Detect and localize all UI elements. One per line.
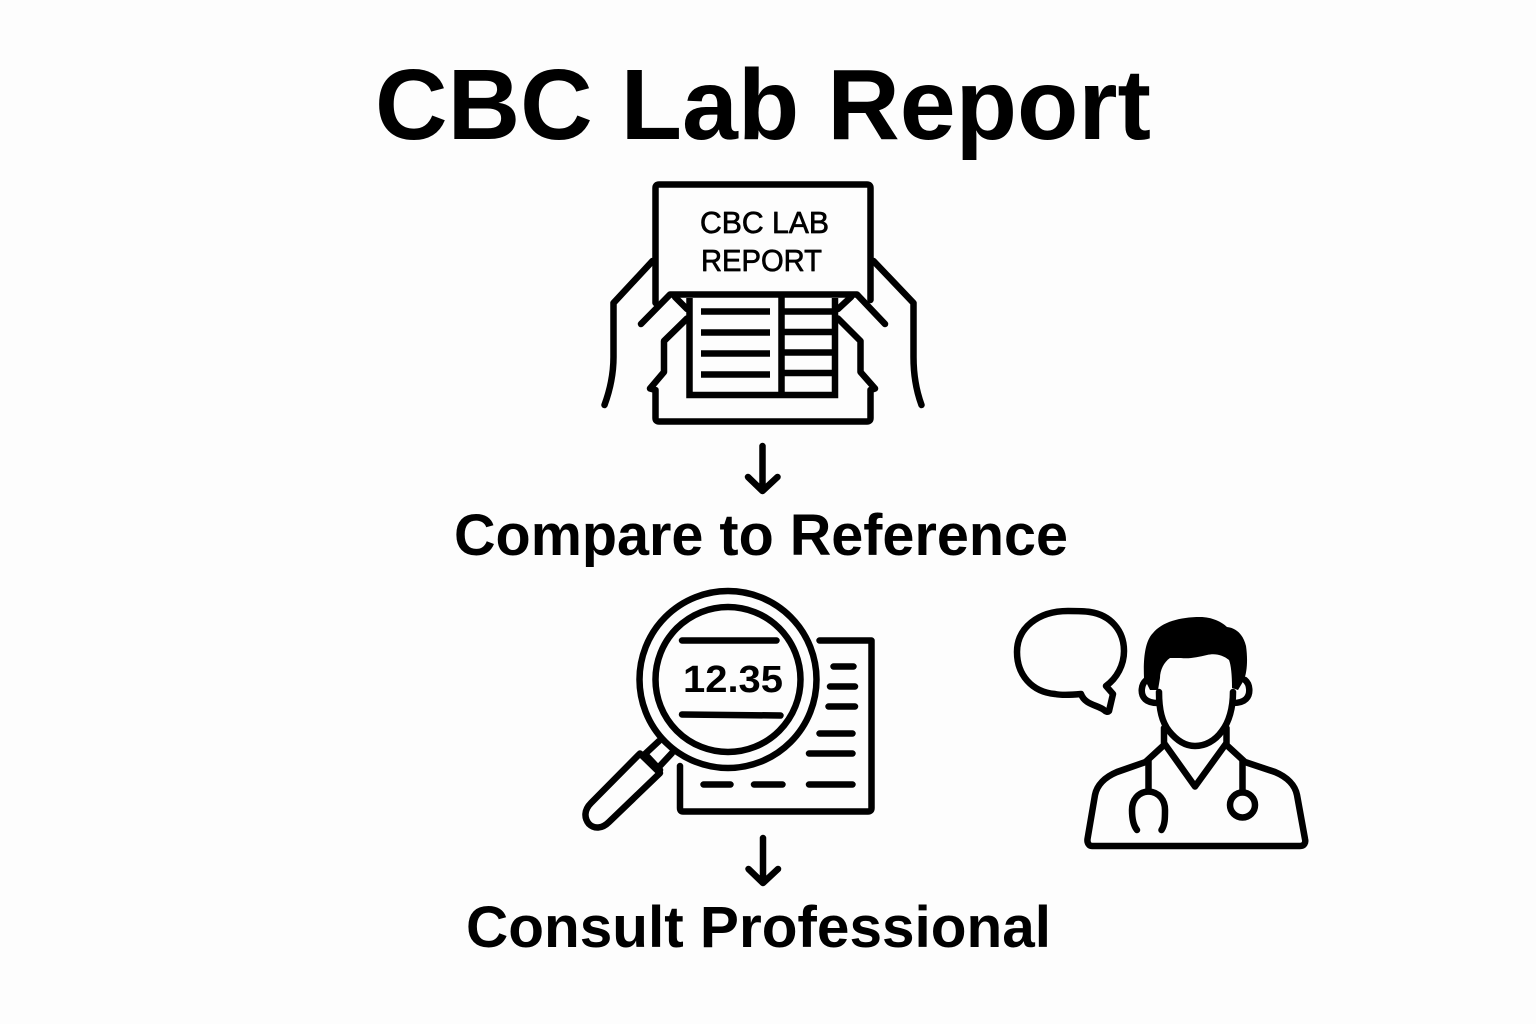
neck and collar (1164, 728, 1226, 786)
icon: speech bubble (1017, 611, 1124, 712)
title: CBC Lab Report (375, 49, 1151, 161)
report title text: CBC LAB (700, 206, 829, 240)
arrow: compare to consult (748, 838, 778, 883)
report title text (700, 206, 829, 278)
icon: doctor with stethoscope (1087, 617, 1305, 846)
coat (1087, 745, 1305, 846)
icon: magnifier over document (585, 591, 872, 828)
handle (585, 741, 672, 828)
document lines (704, 666, 855, 784)
arrow: report to compare (748, 446, 778, 491)
lens value: 12.35 (683, 659, 783, 701)
right hand (874, 261, 922, 405)
document (680, 640, 872, 812)
stethoscope left (1132, 760, 1165, 830)
heading: compare to reference: Compare to Reference (454, 503, 1068, 568)
report lower outline (650, 297, 875, 422)
results table (690, 296, 835, 395)
report top sheet (656, 184, 870, 303)
ears (1142, 680, 1249, 703)
icon: hands holding lab report (604, 184, 922, 422)
left hand (604, 261, 652, 405)
lens (640, 591, 816, 768)
hair (1144, 617, 1247, 690)
face (1159, 692, 1233, 746)
report title text: REPORT (701, 244, 822, 278)
stethoscope right (1239, 760, 1246, 792)
lens lines (682, 640, 780, 716)
heading: consult professional: Consult Professional (466, 895, 1051, 960)
thumbs and fold bar (641, 294, 885, 324)
